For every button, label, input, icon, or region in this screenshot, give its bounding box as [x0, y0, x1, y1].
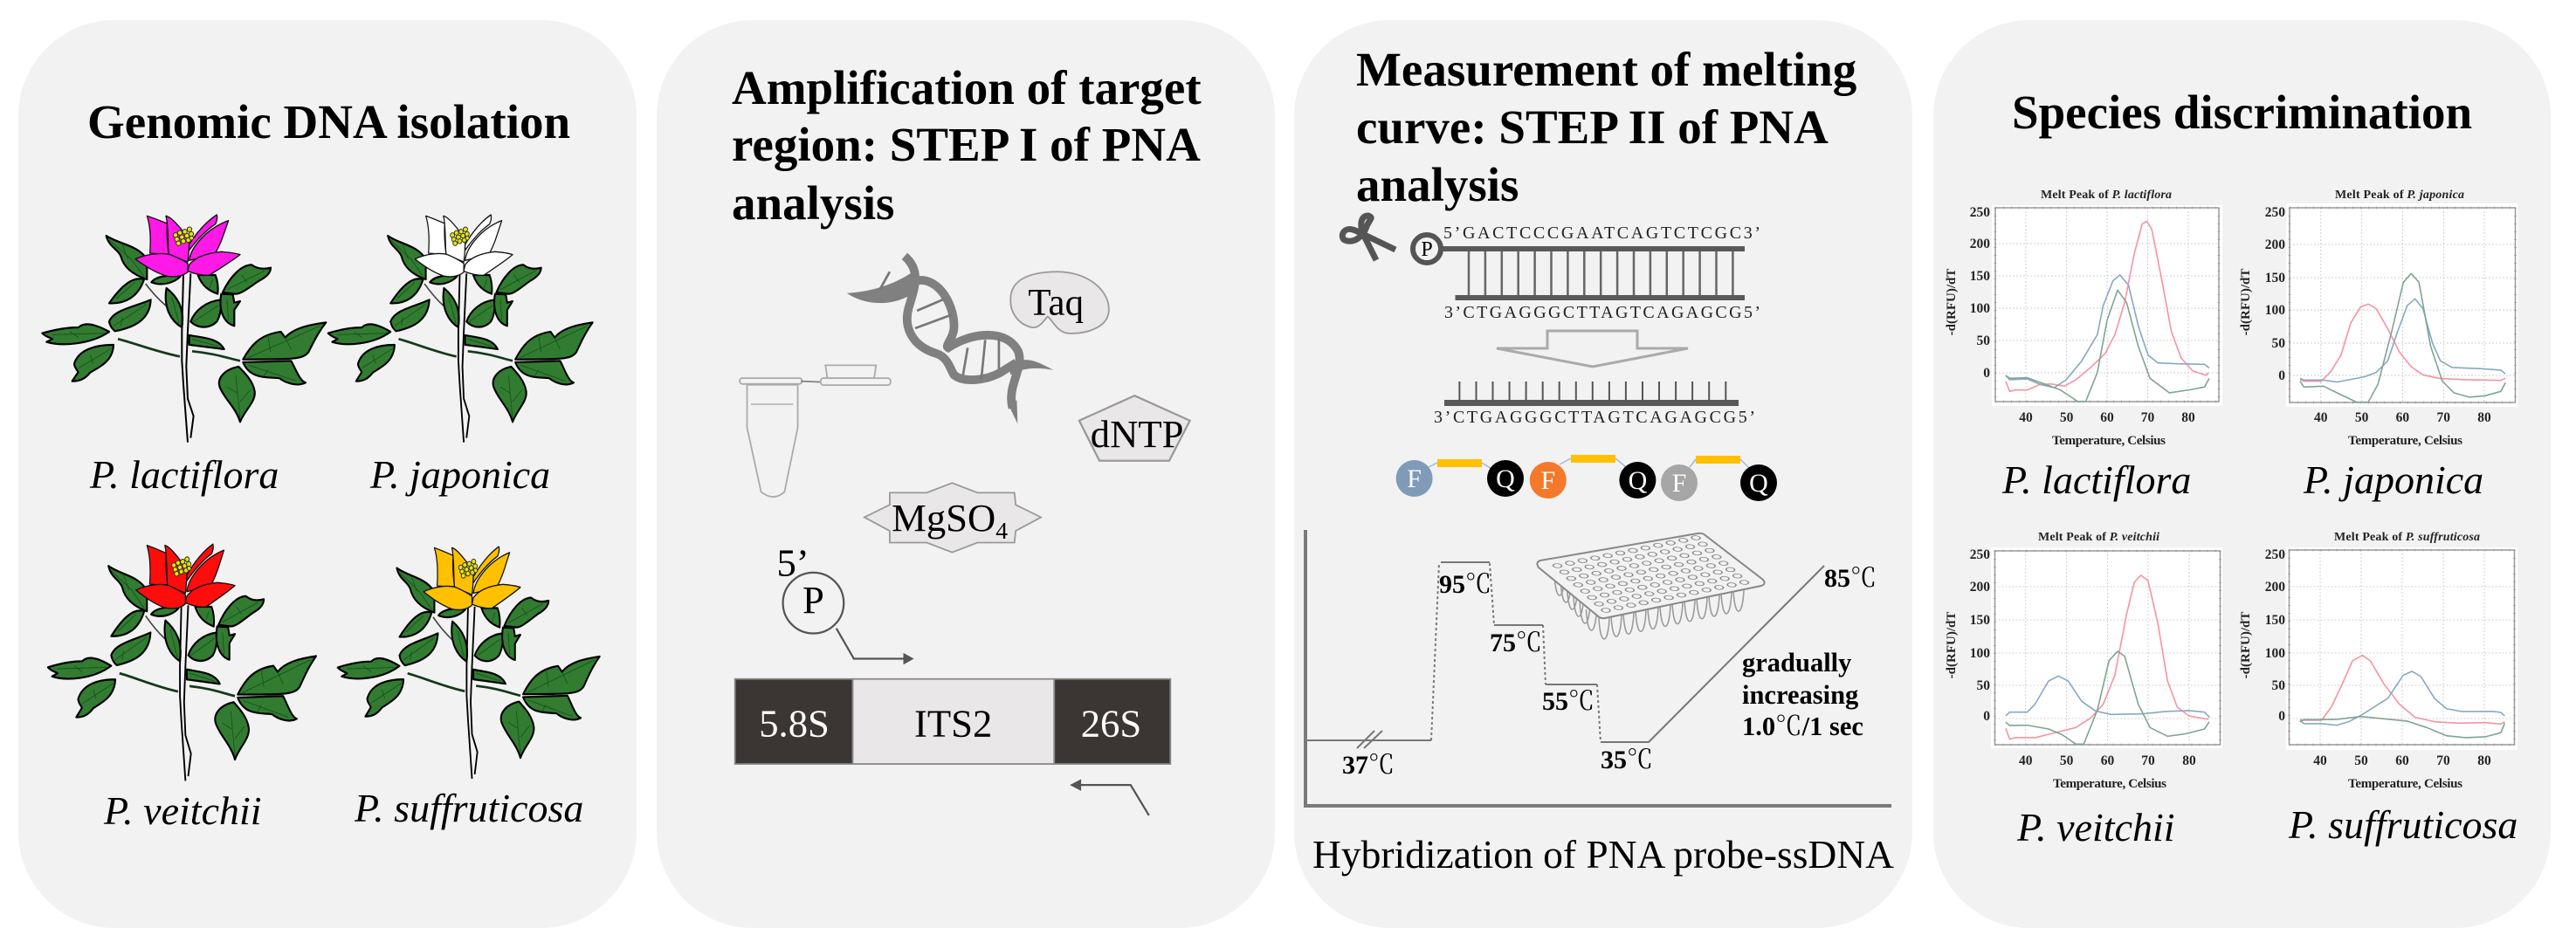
chart: melt peak of P. suffruticosa: 60	[2395, 753, 2409, 768]
icon: PNA probes with fluorophore and quencher: Q	[1496, 464, 1515, 493]
chart: melt peak of P. japonica: -d(RFU)/dT	[2239, 269, 2253, 335]
chart: melt peak of P. lactiflora: 60	[2100, 410, 2114, 425]
chart: temperature profile: 95℃	[1439, 570, 1491, 599]
chart: temperature profile	[1304, 530, 1891, 806]
chart: melt peak of P. veitchii: 100	[1970, 646, 1990, 661]
icon: red flower P. veitchii	[48, 544, 316, 781]
label: P. veitchii chart: P. veitchii	[2016, 805, 2175, 849]
panel: measurement of melting curve	[1294, 20, 1912, 928]
icon: 5' phosphate primer with forward arrow	[776, 540, 914, 664]
chart: temperature profile: 85℃	[1824, 564, 1877, 593]
chart: melt peak of P. veitchii: 250	[1970, 547, 1990, 562]
heading: Measurement of melting curve: curve: STEP II of PNA	[1356, 100, 1829, 154]
chart: melt peak of P. suffruticosa: 100	[2265, 646, 2285, 661]
gene diagram: 5.8S ITS2 26S: 26S	[1081, 701, 1141, 745]
heading: Measurement of melting curve: Measurement of melting	[1356, 43, 1856, 96]
chart: melt peak of P. veitchii	[1945, 531, 2222, 791]
chart: melt peak of P. veitchii: 80	[2182, 753, 2196, 768]
annotation: gradually increasing: increasing	[1742, 680, 1858, 710]
chart: melt peak of P. japonica: Temperature, Celsius	[2348, 434, 2462, 448]
label: P. lactiflora chart: P. lactiflora	[2001, 457, 2191, 502]
icon: white flower P. japonica	[328, 215, 593, 443]
chart: melt peak of P. lactiflora: 150	[1970, 269, 1990, 284]
diagram: probe bound to ssDNA duplex	[1413, 223, 1760, 322]
icon: MgSO4 star: 4	[995, 517, 1008, 544]
icon: dNTP pentagon	[1079, 395, 1190, 461]
caption: hybridization: Hybridization of PNA probe-ssDNA	[1312, 832, 1894, 877]
chart: melt peak of P. japonica: 0	[2278, 368, 2285, 383]
chart: melt peak of P. veitchii: Temperature, Celsius	[2053, 777, 2166, 791]
icon: Taq enzyme	[1010, 272, 1109, 334]
label: P. suffruticosa: P. suffruticosa	[354, 786, 583, 830]
chart: melt peak of P. japonica: 150	[2265, 271, 2285, 285]
gene diagram: 5.8S ITS2 26S	[735, 679, 1170, 764]
chart: melt peak of P. suffruticosa: Temperature, Celsius	[2348, 777, 2462, 791]
annotation: gradually increasing: gradually	[1742, 648, 1851, 677]
chart: melt peak of P. japonica: 100	[2265, 303, 2285, 318]
chart: melt peak of P. veitchii: 70	[2141, 753, 2155, 768]
chart: melt peak of P. veitchii: -d(RFU)/dT	[1945, 612, 1959, 678]
label: P. lactiflora: P. lactiflora	[89, 452, 279, 497]
chart: melt peak of P. lactiflora: 50	[1977, 334, 1990, 348]
arrow: hollow down arrow	[1497, 331, 1688, 367]
chart: melt peak of P. suffruticosa	[2239, 531, 2517, 791]
heading: Amplification of target region: analysis	[732, 176, 894, 230]
chart: melt peak of P. lactiflora: Temperature, Celsius	[2052, 434, 2166, 448]
icon: yellow flower P. suffruticosa	[338, 547, 600, 779]
icon: 5' phosphate primer with forward arrow: 5’	[776, 540, 809, 584]
diagram: probe bound to ssDNA duplex: P	[1421, 238, 1433, 261]
chart: melt peak of P. lactiflora: 40	[2019, 410, 2033, 425]
chart: melt peak of P. veitchii: 60	[2101, 753, 2115, 768]
chart: melt peak of P. japonica	[2239, 189, 2517, 448]
PCR reagents and gene diagram	[735, 256, 1190, 815]
diagram: probe bound to ssDNA duplex: 3’CTGAGGGCTTAGTCAGAGCG5’	[1444, 303, 1760, 322]
panel: amplification of target region	[657, 20, 1275, 928]
icon: MgSO4 star	[864, 483, 1041, 553]
chart: melt peak of P. japonica: 80	[2477, 410, 2491, 425]
annotation: gradually increasing: 1.0	[1742, 712, 1775, 741]
annotation: gradually increasing: ℃/1 sec	[1775, 712, 1863, 741]
icon: PNA probes with fluorophore and quencher: Q	[1749, 469, 1768, 498]
chart: melt peak of P. veitchii: 40	[2019, 753, 2033, 768]
diagram: single-stranded DNA: 3’CTGAGGGCTTAGTCAGAGCG5’	[1434, 408, 1755, 427]
chart: melt peak of P. veitchii: 0	[1983, 709, 1990, 724]
icon: PNA probes with fluorophore and quencher: Q	[1629, 466, 1648, 495]
chart: melt peak of P. japonica: 200	[2265, 237, 2285, 252]
icon: Taq enzyme: Taq	[1028, 282, 1084, 323]
gene diagram: 5.8S ITS2 26S: 5.8S	[759, 701, 830, 745]
chart: melt peak of P. lactiflora: 250	[1970, 205, 1990, 220]
chart: melt peak of P. veitchii: 50	[1977, 678, 1990, 693]
heading: Species discrimination: Species discrimination	[2012, 86, 2472, 139]
chart: melt peak of P. lactiflora: 100	[1970, 301, 1990, 316]
icon: PNA probes with fluorophore and quencher: F	[1540, 466, 1555, 495]
icon: DNA helix	[847, 256, 1053, 423]
icon: dNTP pentagon: dNTP	[1091, 412, 1183, 456]
chart: melt peak of P. suffruticosa: 150	[2265, 613, 2285, 628]
chart: melt peak of P. suffruticosa: Melt Peak of P. suffruticosa	[2334, 531, 2480, 544]
icon: PNA probes with fluorophore and quencher: F	[1407, 464, 1422, 493]
icon: scissors	[1342, 216, 1395, 260]
icon: PNA probes with fluorophore and quencher: F	[1672, 469, 1686, 498]
heading: Amplification of target region: region: STEP I of PNA	[732, 118, 1201, 171]
chart: melt peak of P. lactiflora: 50	[2060, 410, 2074, 425]
chart: melt peak of P. lactiflora: 200	[1970, 237, 1990, 251]
chart: melt peak of P. japonica: 250	[2265, 205, 2285, 220]
chart: melt peak of P. suffruticosa: 80	[2477, 753, 2491, 768]
chart: melt peak of P. lactiflora: 80	[2181, 410, 2195, 425]
heading: Amplification of target region: Amplification of target	[732, 61, 1202, 114]
chart: melt peak of P. veitchii: 150	[1970, 613, 1990, 628]
chart: melt peak of P. suffruticosa: 250	[2265, 547, 2285, 562]
chart: temperature profile: 37℃	[1342, 751, 1395, 780]
label: P. veitchii: P. veitchii	[103, 788, 262, 833]
icon: PNA probes with fluorophore and quencher	[1396, 455, 1777, 501]
panel: species discrimination	[1933, 20, 2551, 928]
gene diagram: 5.8S ITS2 26S: ITS2	[914, 701, 992, 745]
icon: MgSO4 star: MgSO	[892, 496, 995, 540]
chart: melt peak of P. japonica: 70	[2437, 410, 2450, 425]
icon: PCR tube	[740, 365, 891, 497]
chart: melt peak of P. suffruticosa: -d(RFU)/dT	[2239, 612, 2253, 678]
chart: melt peak of P. lactiflora: 70	[2141, 410, 2155, 425]
chart: melt peak of P. japonica: Melt Peak of P. japonica	[2335, 189, 2464, 202]
chart: melt peak of P. japonica: 60	[2396, 410, 2409, 425]
chart: melt peak of P. suffruticosa: 50	[2272, 678, 2285, 693]
diagram: probe bound to ssDNA duplex: 5’GACTCCCGAATCAGTCTCGC3’	[1443, 223, 1760, 243]
chart: melt peak of P. lactiflora: Melt Peak of P. lactiflora	[2041, 189, 2172, 202]
chart: melt peak of P. suffruticosa: 70	[2436, 753, 2450, 768]
chart: melt peak of P. suffruticosa: 40	[2313, 753, 2327, 768]
chart: melt peak of P. lactiflora: 0	[1983, 366, 1990, 381]
diagram: single-stranded DNA	[1434, 382, 1755, 427]
heading: Genomic DNA isolation: Genomic DNA isolation	[87, 95, 570, 148]
label: P. japonica chart: P. japonica	[2303, 457, 2483, 502]
chart: melt peak of P. lactiflora: -d(RFU)/dT	[1945, 269, 1959, 335]
chart: temperature profile: 35℃	[1601, 746, 1653, 774]
chart: temperature profile: 75℃	[1490, 629, 1542, 657]
icon: magenta flower P. lactiflora	[42, 215, 326, 443]
chart: melt peak of P. veitchii: 200	[1970, 580, 1990, 595]
heading: Measurement of melting curve: analysis	[1356, 158, 1519, 211]
chart: melt peak of P. suffruticosa: 50	[2354, 753, 2368, 768]
chart: melt peak of P. lactiflora	[1945, 189, 2222, 448]
chart: melt peak of P. veitchii: 50	[2060, 753, 2074, 768]
arrow: reverse primer	[1070, 779, 1149, 815]
icon: 5' phosphate primer with forward arrow: P	[802, 578, 824, 622]
icon: 96-well plate	[1537, 533, 1765, 639]
panel: genomic DNA isolation	[18, 20, 637, 928]
chart: melt peak of P. suffruticosa: 0	[2278, 709, 2285, 724]
label: P. japonica: P. japonica	[369, 452, 550, 497]
chart: melt peak of P. japonica: 50	[2355, 410, 2369, 425]
label: P. suffruticosa chart: P. suffruticosa	[2288, 802, 2517, 847]
chart: melt peak of P. veitchii: Melt Peak of P. veitchii	[2038, 531, 2159, 544]
chart: melt peak of P. japonica: 50	[2272, 336, 2285, 351]
chart: temperature profile: 55℃	[1542, 687, 1595, 716]
chart: melt peak of P. suffruticosa: 200	[2265, 580, 2285, 595]
chart: melt peak of P. japonica: 40	[2314, 410, 2328, 425]
